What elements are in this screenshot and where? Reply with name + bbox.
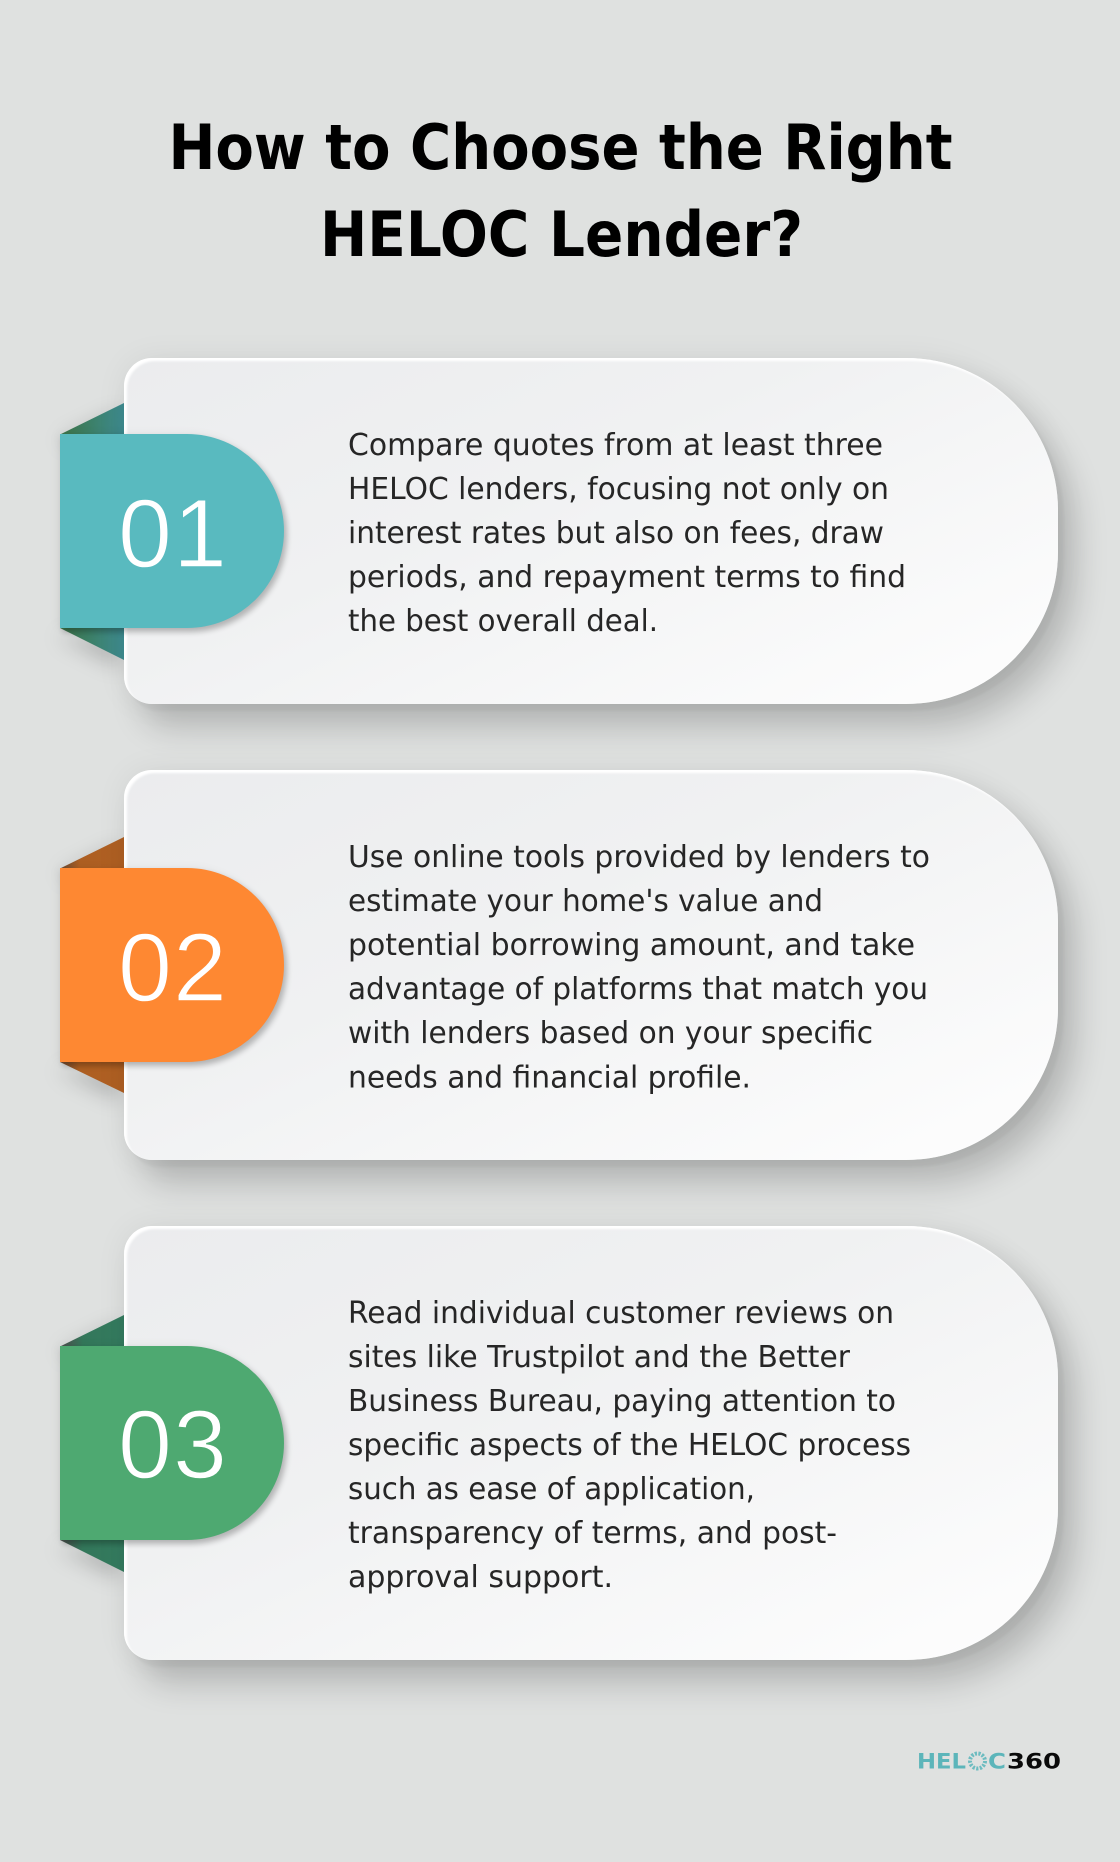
ribbon fold: step 3 [60,1315,124,1582]
text: step 1: HELOC lenders, focusing not only on [348,472,889,507]
ribbon fold: step 2 [60,837,124,1103]
text: step 2: advantage of platforms that match you [348,972,928,1007]
logo: HELOC360: 360 [1007,1750,1061,1774]
card: step 2 [124,770,1058,1160]
text: step 2: potential borrowing amount, and take [348,928,915,963]
text: step 1: periods, and repayment terms to find [348,560,906,595]
text: step 2: Use online tools provided by lenders to [348,840,930,875]
text: step 3: sites like Trustpilot and the Better [348,1340,850,1375]
text: step 2: with lenders based on your specific [348,1016,873,1051]
panel: step 1 [56,356,1088,740]
number 01: 01 [118,479,228,588]
text: step 3: Read individual customer reviews on [348,1296,894,1331]
ribbon fold: step 1 [60,403,124,670]
text: step 3: Business Bureau, paying attention to [348,1384,896,1419]
title: HELOC Lender? [320,198,803,271]
text: step 3: approval support. [348,1560,613,1595]
text: step 3: transparency of terms, and post- [348,1516,837,1551]
text: step 3: such as ease of application, [348,1472,755,1507]
panel: step 2 [56,768,1088,1196]
number 03: 03 [118,1390,228,1499]
text: step 2: estimate your home's value and [348,884,823,919]
text: step 2: needs and financial profile. [348,1060,751,1096]
badge: 03 [60,1346,284,1540]
text: step 1 [348,428,906,639]
number 02: 02 [118,913,228,1022]
logo: HELOC360: O [969,1750,986,1774]
badge: 01 [60,434,284,628]
text: step 1: Compare quotes from at least three [348,428,883,463]
text: step 2 [348,840,930,1096]
text: step 1: the best overall deal. [348,604,658,639]
text: step 1: interest rates but also on fees, draw [348,516,884,551]
logo: HELOC360: HEL [917,1750,966,1774]
logo: HELOC360 [917,1750,1061,1774]
title: How to Choose the Right [168,111,952,184]
text: step 3: specific aspects of the HELOC process [348,1428,911,1463]
badge: 02 [60,868,284,1062]
panel: step 3 [56,1224,1088,1696]
title [168,111,952,271]
text: step 3 [348,1296,911,1595]
card: step 3 [124,1226,1058,1660]
logo: HELOC360: C [988,1750,1006,1774]
card: step 1 [124,358,1058,704]
